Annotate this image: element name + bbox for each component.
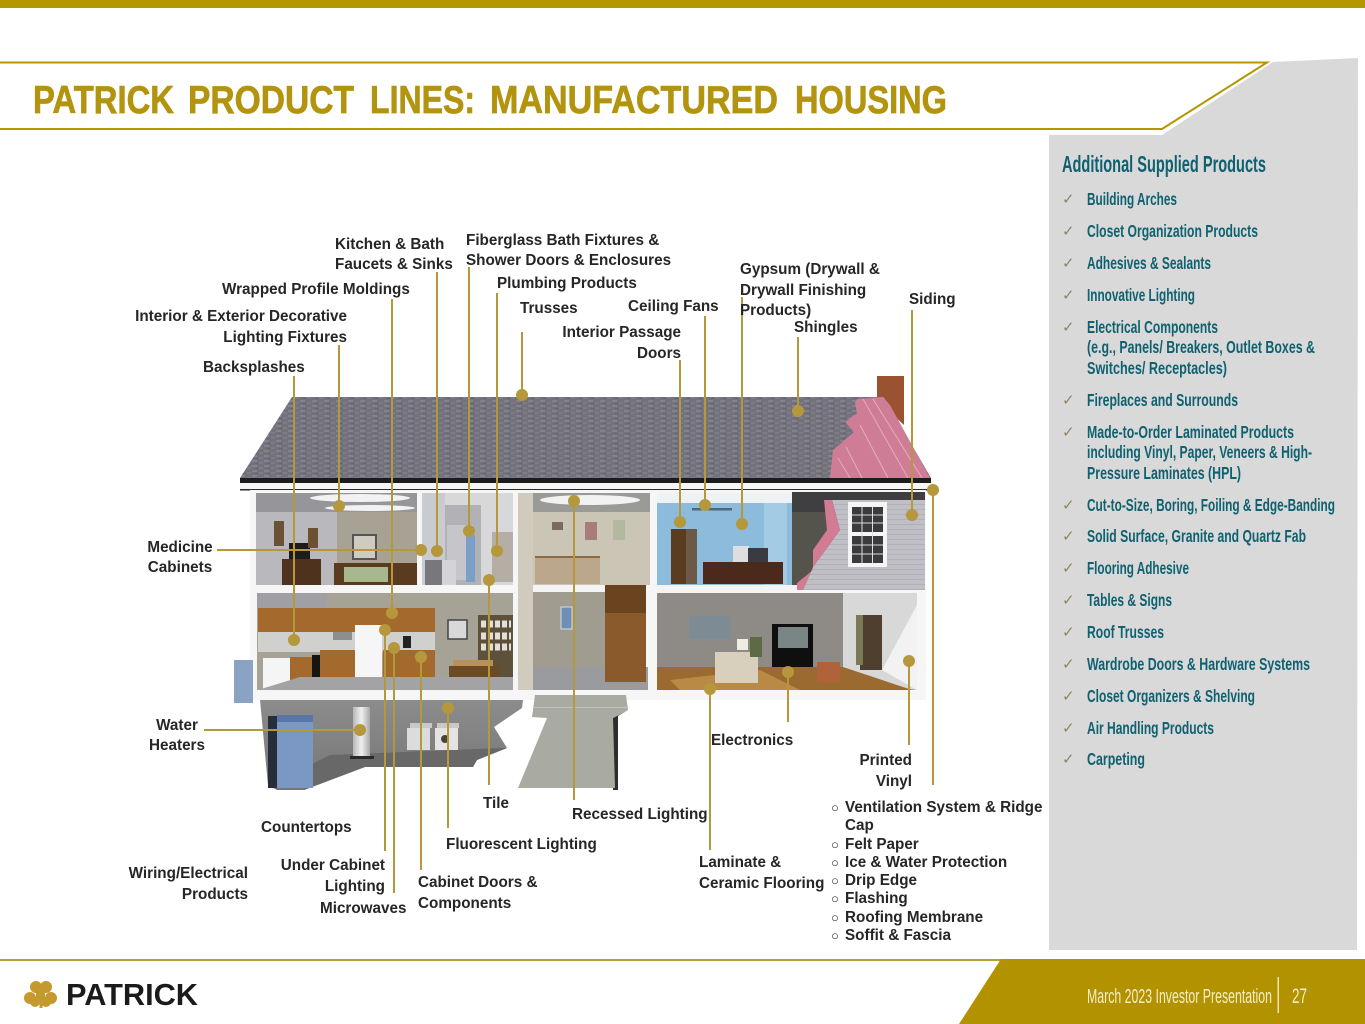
title: PRODUCT <box>188 79 354 122</box>
sidebar checklist: ✓ <box>1062 222 1075 240</box>
callout: Tile: Tile <box>483 795 509 812</box>
sidebar checklist: ✓ <box>1062 559 1075 577</box>
sidebar checklist: Closet Organization Products <box>1087 221 1258 241</box>
water heater tank <box>350 707 374 759</box>
sidebar: additional supplied products <box>1062 151 1335 769</box>
basement floor <box>304 748 507 790</box>
sidebar checklist: Fireplaces and Surrounds <box>1087 390 1238 410</box>
callout: Microwaves <box>320 642 406 917</box>
callout: Fiberglass Bath Fixtures: Shower Doors & Enclosures <box>466 252 671 269</box>
living room <box>657 593 917 690</box>
callout: Laminate & Ceramic Flooring: Ceramic Flooring <box>699 875 824 892</box>
callout: Countertops: Countertops <box>261 819 352 836</box>
callout: Under Cabinet Lighting: Under Cabinet <box>281 857 385 874</box>
roofing components list: Roofing Membrane <box>845 909 983 926</box>
sidebar checklist: ✓ <box>1062 496 1075 514</box>
sidebar checklist: Air Handling Products <box>1087 718 1214 738</box>
roofing components list: Soffit & Fascia <box>845 927 951 944</box>
sidebar checklist: ✓ <box>1062 286 1075 304</box>
sidebar checklist: Adhesives & Sealants <box>1087 253 1211 273</box>
sidebar checklist: ✓ <box>1062 318 1075 336</box>
callout: Ceiling Fans: Ceiling Fans <box>628 298 719 315</box>
roofing components list: Flashing <box>845 890 908 907</box>
callout: Shingles <box>792 319 858 417</box>
callout: Kitchen & Bath Faucets & Sinks: Kitchen & Bath <box>335 236 444 253</box>
sidebar checklist <box>1062 189 1335 769</box>
sidebar checklist: ✓ <box>1062 391 1075 409</box>
callout: Interior Passage Doors: Doors <box>637 345 681 362</box>
callout: Gypsum: Gypsum (Drywall & <box>740 261 880 278</box>
callout: Shingles: Shingles <box>794 319 858 336</box>
sidebar checklist: Pressure Laminates (HPL) <box>1087 463 1241 483</box>
washer and dryer <box>407 723 459 750</box>
callout: Plumbing Products <box>491 275 637 557</box>
roofing components list: ○ <box>831 891 839 906</box>
sidebar checklist: ✓ <box>1062 423 1075 441</box>
wordmark: PATRICK <box>66 977 199 1012</box>
callout: Fluorescent Lighting <box>442 702 597 853</box>
basement walls <box>260 700 523 790</box>
callout: Laminate & Ceramic Flooring <box>699 683 824 892</box>
roof insulation <box>830 397 930 478</box>
sidebar checklist: Carpeting <box>1087 749 1145 769</box>
callout: Under Cabinet Lighting <box>281 624 391 895</box>
callout: Gypsum <box>736 261 880 530</box>
basement <box>260 700 523 790</box>
callout: Water Heaters: Heaters <box>149 737 205 754</box>
sidebar checklist: Switches/ Receptacles) <box>1087 358 1227 378</box>
sidebar checklist: ✓ <box>1062 527 1075 545</box>
callout: Backsplashes <box>203 359 305 646</box>
sidebar checklist: ✓ <box>1062 750 1075 768</box>
callout: Fiberglass Bath Fixtures <box>463 232 671 537</box>
lower hall with stairs <box>533 540 648 690</box>
sidebar checklist: ✓ <box>1062 190 1075 208</box>
callout: Tile <box>483 574 509 812</box>
callout: Gypsum: Products) <box>740 302 811 319</box>
roofing components list: ○ <box>831 855 839 870</box>
sidebar checklist: ✓ <box>1062 687 1075 705</box>
roofing components list <box>831 799 1042 944</box>
house illustration <box>234 376 931 790</box>
bathroom <box>422 493 513 585</box>
callout: Siding <box>906 291 956 521</box>
callout: Cabinet Doors & Components: Cabinet Doors & <box>418 874 537 891</box>
callout: Electronics <box>711 666 794 749</box>
callout: Water Heaters: Water <box>156 717 198 734</box>
callout: Interior Passage Doors: Interior Passage <box>562 324 681 341</box>
callout: Cabinet Doors & Components: Components <box>418 895 511 912</box>
callout: Electronics: Electronics <box>711 732 793 749</box>
sidebar checklist: Flooring Adhesive <box>1087 558 1189 578</box>
title: MANUFACTURED <box>490 79 778 122</box>
sidebar checklist: ✓ <box>1062 719 1075 737</box>
callout: Interior & Exterior Decorative Lighting Fixtures <box>135 308 347 512</box>
kitchen <box>257 593 513 690</box>
title: LINES: <box>370 79 475 122</box>
callout: Fluorescent Lighting: Fluorescent Lighting <box>446 836 597 853</box>
sidebar checklist: ✓ <box>1062 591 1075 609</box>
footer gold band <box>959 959 1365 1024</box>
roofing components list: ○ <box>831 837 839 852</box>
callout: Wrapped Profile Moldings <box>222 281 410 619</box>
wall insulation <box>797 500 840 590</box>
roofing components list: ○ <box>831 910 839 925</box>
footer separator <box>1278 977 1279 1013</box>
sidebar checklist: ✓ <box>1062 623 1075 641</box>
front walkway <box>518 695 628 790</box>
roofing components list: ○ <box>831 873 839 888</box>
title: HOUSING <box>795 79 947 122</box>
callout: Wiring/Electrical Products <box>129 865 248 903</box>
callout: Wrapped Profile Moldings: Wrapped Profile Moldings <box>222 281 410 298</box>
callout: Backsplashes: Backsplashes <box>203 359 305 376</box>
callout: Wiring/Electrical Products: Products <box>182 886 248 903</box>
callout: Kitchen & Bath Faucets & Sinks <box>335 236 453 557</box>
callout: Interior & Exterior Decorative Lighting Fixtures: Lighting Fixtures <box>223 329 347 346</box>
roof shingles <box>240 397 931 478</box>
callout: Interior & Exterior Decorative Lighting Fixtures: Interior & Exterior Decorative <box>135 308 347 325</box>
callout: Kitchen & Bath Faucets & Sinks: Faucets & Sinks <box>335 256 453 273</box>
sidebar checklist: Electrical Components <box>1087 317 1218 337</box>
office room <box>657 493 792 585</box>
callout: Microwaves: Microwaves <box>320 900 406 917</box>
callout: Printed Vinyl: Printed <box>859 752 912 769</box>
upper hall <box>518 493 650 690</box>
sidebar checklist: Innovative Lighting <box>1087 285 1195 305</box>
callout: Printed Vinyl: Vinyl <box>876 773 912 790</box>
house body <box>250 490 926 700</box>
callout: Interior Passage Doors <box>562 324 686 528</box>
roofing components list: Ice & Water Protection <box>845 854 1007 871</box>
chimney <box>877 376 904 425</box>
bedroom <box>256 493 417 585</box>
title <box>33 79 947 122</box>
furnace <box>268 715 313 788</box>
callout: Trusses <box>516 300 578 401</box>
callout: Siding: Siding <box>909 291 956 308</box>
callout: Medicine Cabinets <box>147 539 427 576</box>
exposed wall with siding <box>792 492 925 590</box>
callout: Medicine Cabinets: Medicine <box>147 539 213 556</box>
title: PATRICK <box>33 79 174 122</box>
callout: Recessed Lighting <box>568 495 708 823</box>
callout: Ceiling Fans <box>628 298 719 511</box>
sidebar checklist: ✓ <box>1062 254 1075 272</box>
roofing components list: Ventilation System & Ridge <box>845 799 1042 816</box>
top gold band <box>0 0 1365 8</box>
callout: Printed Vinyl <box>859 655 915 790</box>
footer rule <box>0 959 1003 961</box>
sidebar checklist: ✓ <box>1062 655 1075 673</box>
sidebar checklist: Tables & Signs <box>1087 590 1172 610</box>
callout: Trusses: Trusses <box>520 300 578 317</box>
callout: Gypsum: Drywall Finishing <box>740 282 866 299</box>
callout: Under Cabinet Lighting: Lighting <box>325 878 385 895</box>
logo: Patrick <box>24 977 199 1012</box>
callout: Medicine Cabinets: Cabinets <box>148 559 212 576</box>
floor slab <box>657 585 797 593</box>
callout: Plumbing Products: Plumbing Products <box>497 275 637 292</box>
callout: Cabinet Doors & Components <box>415 651 537 912</box>
title banner outline <box>0 62 1267 129</box>
callout: Laminate & Ceramic Flooring: Laminate & <box>699 854 781 871</box>
roofing components list: ○ <box>831 800 839 815</box>
eave <box>240 483 931 489</box>
callout: Water Heaters <box>149 717 366 754</box>
callout: Recessed Lighting: Recessed Lighting <box>572 806 708 823</box>
roof fascia <box>240 478 931 483</box>
callout: Wiring/Electrical Products: Wiring/Electrical <box>129 865 248 882</box>
sidebar panel background <box>1049 58 1358 950</box>
page number: 27 <box>1292 985 1307 1008</box>
callout: Fiberglass Bath Fixtures: Fiberglass Bath Fixtures & <box>466 232 659 249</box>
sidebar checklist: Building Arches <box>1087 189 1177 209</box>
callout: roofing line <box>927 484 939 785</box>
sidebar checklist: Roof Trusses <box>1087 622 1164 642</box>
roofing components list: Felt Paper <box>845 836 919 853</box>
window <box>848 502 887 567</box>
roofing components list: Cap <box>845 817 874 834</box>
roofing components list: Drip Edge <box>845 872 917 889</box>
outdoor tank <box>234 660 253 703</box>
roofing components list: ○ <box>831 928 839 943</box>
sidebar checklist: Closet Organizers & Shelving <box>1087 686 1255 706</box>
icon: gold clover <box>24 981 57 1008</box>
